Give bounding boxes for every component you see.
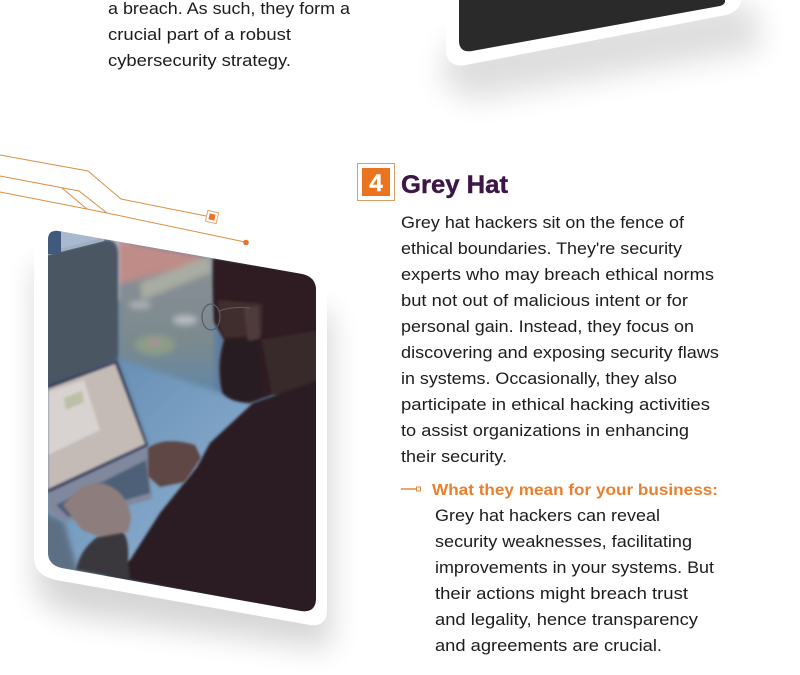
subheading: What they mean for your business: xyxy=(432,482,718,499)
text block: business meaning: and agreements are crucial. xyxy=(435,636,662,655)
icon: circuit dot node xyxy=(243,240,249,245)
text block: business meaning: security weaknesses, facilitating xyxy=(435,532,692,551)
text block: description: but not out of malicious intent or for xyxy=(401,291,688,310)
text block: description: personal gain. Instead, they focus on xyxy=(401,317,694,336)
text block: description: ethical boundaries. They're security xyxy=(401,239,683,258)
heading: Grey Hat xyxy=(401,171,509,199)
text block: description: experts who may breach ethical norms xyxy=(401,265,714,284)
icon: number badge 4 xyxy=(358,164,394,200)
text block: description xyxy=(401,213,719,466)
text block: description: discovering and exposing security flaws xyxy=(401,343,719,362)
text block: business meaning: Grey hat hackers can reveal xyxy=(435,506,660,525)
text block: description: participate in ethical hacking activities xyxy=(401,395,710,414)
icon: number badge 4: 4 xyxy=(369,170,383,197)
text block: description: in systems. Occasionally, they also xyxy=(401,369,677,388)
text block: business meaning: and legality, hence transparency xyxy=(435,610,699,629)
photo: man at laptop xyxy=(40,225,325,620)
text block: description: to assist organizations in enhancing xyxy=(401,421,689,440)
body xyxy=(105,378,325,620)
text block: business meaning: improvements in your systems. But xyxy=(435,558,714,577)
desk xyxy=(40,358,256,570)
panel: main photo card xyxy=(34,222,331,649)
text block: description: Grey hat hackers sit on the fence of xyxy=(401,213,684,232)
panel: top photo card xyxy=(440,0,760,100)
text block: top paragraph: cybersecurity strategy. xyxy=(108,51,291,70)
window pillar xyxy=(40,240,118,385)
circuit lines decoration xyxy=(0,155,249,245)
text block: business meaning xyxy=(435,506,714,655)
text block: top paragraph: crucial part of a robust xyxy=(108,25,291,44)
text block: top paragraph xyxy=(108,0,351,70)
head xyxy=(213,258,325,403)
hands xyxy=(63,441,201,537)
glasses xyxy=(202,304,250,330)
laptop xyxy=(48,360,152,522)
text block: description: their security. xyxy=(401,447,507,466)
text block: business meaning: their actions might breach trust xyxy=(435,584,688,603)
icon: subheading connector xyxy=(401,487,420,491)
icon: circuit square node xyxy=(205,210,219,224)
